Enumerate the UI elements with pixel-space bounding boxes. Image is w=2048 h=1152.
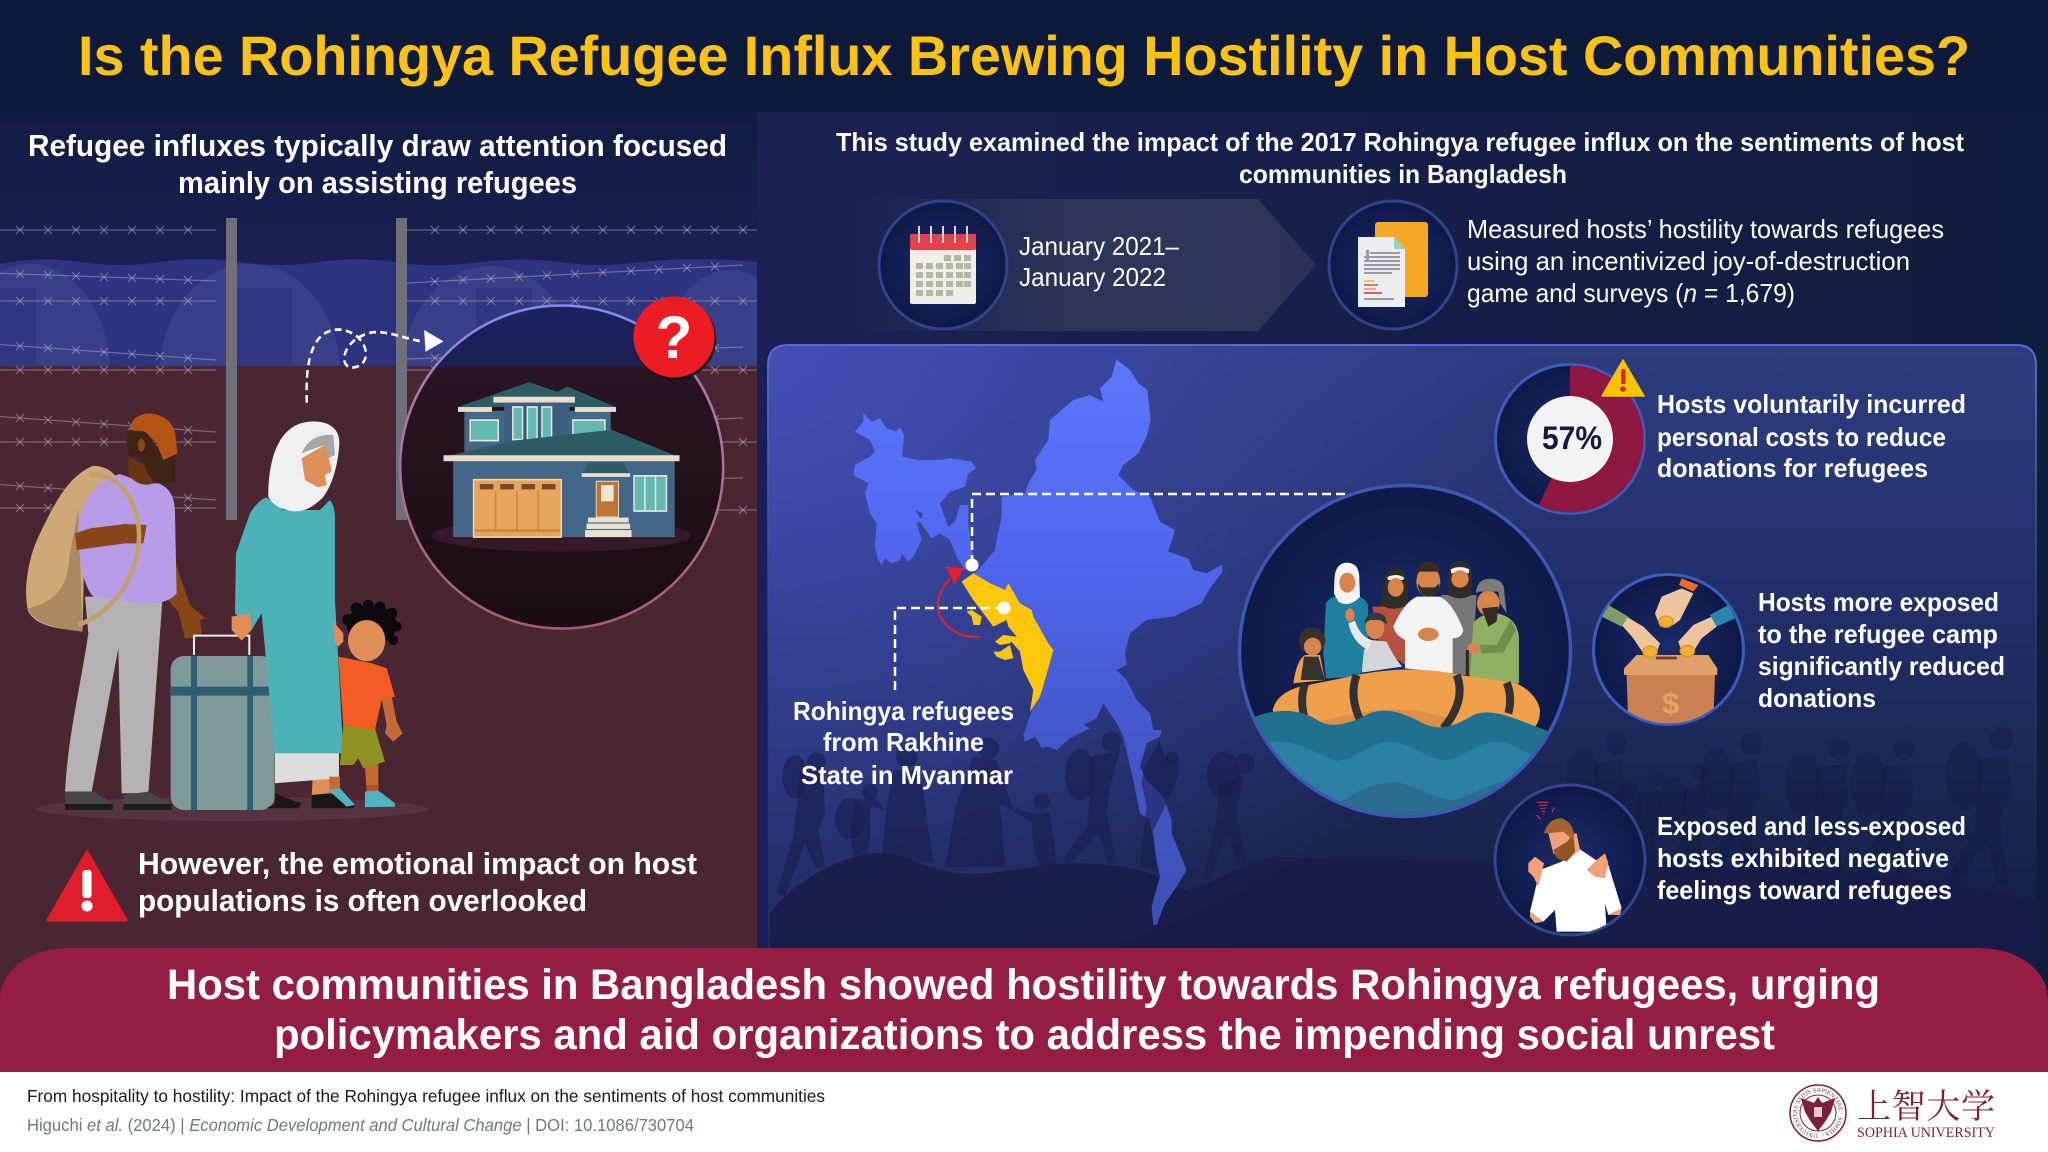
logo: Sophia University xyxy=(1789,1079,1995,1142)
figure: sea waves xyxy=(1253,711,1550,823)
study dates: January 2021– xyxy=(1019,231,1179,261)
map: Bangladesh xyxy=(853,413,978,570)
icon: question mark badge: ? xyxy=(656,304,692,371)
fence posts xyxy=(226,218,407,520)
citation footer: From hospitality to hostility: Impact of the Rohingya refugee influx on the sentiments of host communities xyxy=(27,1086,825,1106)
logo: Sophia University: 上智大学 xyxy=(1857,1079,1995,1128)
logo: Sophia University: SOPHIA UNIVERSITY xyxy=(1857,1125,1995,1141)
panel: left, refugee influx scene xyxy=(0,112,800,1006)
map: Bangladesh and Myanmar xyxy=(853,359,1223,925)
callout: overlooked emotional impact: However, the emotional impact on host xyxy=(138,846,697,881)
donut segment: 57 percent xyxy=(1512,381,1628,497)
map label: from Rakhine xyxy=(823,727,984,757)
donation box: $ xyxy=(1662,686,1679,720)
dashed connector to Rakhine label xyxy=(895,608,1004,693)
icon: calendar xyxy=(879,201,1007,329)
finding 1 text: Hosts voluntarily incurred xyxy=(1657,389,1966,419)
finding 3 text xyxy=(1657,811,1966,905)
finding 3 text: hosts exhibited negative xyxy=(1657,843,1949,873)
donation box xyxy=(1624,655,1717,727)
map label: State in Myanmar xyxy=(801,760,1013,790)
finding 2 text: donations xyxy=(1758,683,1876,713)
icon: question mark badge xyxy=(634,296,716,380)
map: Rakhine State xyxy=(962,573,1053,712)
stress swirl xyxy=(1537,802,1554,819)
stressed man xyxy=(1528,818,1622,932)
arrow: red displacement arc xyxy=(938,567,980,637)
map location dots xyxy=(966,558,1010,614)
heading: study description: communities in Bangladesh xyxy=(1239,159,1567,189)
map label: Rohingya refugees xyxy=(793,696,1014,726)
illustration: refugees on boat xyxy=(1240,486,1570,823)
finding 3 text: Exposed and less-exposed xyxy=(1657,811,1966,841)
figure: inflatable boat xyxy=(1273,670,1540,733)
heading: left panel: mainly on assisting refugees xyxy=(178,165,577,200)
map label xyxy=(793,696,1014,790)
dashed journey arrow xyxy=(307,330,444,403)
callout: overlooked emotional impact: populations is often overlooked xyxy=(138,883,587,918)
callout: overlooked emotional impact xyxy=(138,846,697,918)
finding 1 text: donations for refugees xyxy=(1657,453,1928,483)
figure: man with sack xyxy=(26,413,205,810)
icon: house xyxy=(431,382,691,552)
heading: left panel: Refugee influxes typically draw attention focused xyxy=(28,128,727,163)
conclusion banner: policymakers and aid organizations to address the impending social unrest xyxy=(274,1011,1775,1059)
conclusion banner: Host communities in Bangladesh showed hostility towards Rohingya refugees, urging xyxy=(167,961,1880,1009)
finding 1: donut chart xyxy=(1496,360,1644,514)
refugee family xyxy=(26,413,403,810)
map: Myanmar xyxy=(962,359,1223,925)
hands with coins xyxy=(1602,578,1735,657)
study method text: Measured hosts’ hostility towards refugees xyxy=(1467,214,1944,244)
study dates xyxy=(1019,231,1179,292)
timeline arrow band xyxy=(852,199,1316,331)
finding 2 text: Hosts more exposed xyxy=(1758,587,1999,617)
panel: findings xyxy=(768,345,2036,1000)
figure: suitcase xyxy=(171,636,275,810)
finding 1 text: personal costs to reduce xyxy=(1657,422,1946,452)
icon: warning sign xyxy=(1602,360,1644,396)
figure: elderly woman xyxy=(232,421,355,808)
conclusion banner xyxy=(0,948,2048,1072)
ground shadow xyxy=(36,797,428,821)
study method text: game and surveys (n = 1,679) xyxy=(1467,278,1795,308)
house thought bubble xyxy=(400,306,723,628)
silhouettes on the right xyxy=(1565,727,2013,888)
study method text: using an incentivized joy-of-destruction xyxy=(1467,246,1910,276)
refugee tents backdrop xyxy=(0,259,800,480)
university seal: UNIVERSITAS SEDIS SAPIENTIAE · SOPHIA · xyxy=(1793,1088,1843,1138)
heading: study description: This study examined the impact of the 2017 Rohingya refugee influx on the sentiments of host xyxy=(836,127,1964,157)
icon: documents xyxy=(1329,201,1457,329)
finding 2 text: to the refugee camp xyxy=(1758,619,1998,649)
citation footer xyxy=(27,1086,825,1135)
study dates: January 2022 xyxy=(1019,262,1166,292)
finding 1: donut chart: 57% xyxy=(1542,420,1602,456)
citation footer: Higuchi et al. (2024) | Economic Development and Cultural Change | DOI: 10.1086/730704 xyxy=(27,1115,694,1135)
heading: study description xyxy=(836,127,1964,189)
finding 3: stressed host icon xyxy=(1495,785,1645,935)
title banner xyxy=(0,0,2048,112)
icon: warning triangle xyxy=(48,852,126,920)
study method text xyxy=(1467,214,1944,308)
finding 2: donation box icon xyxy=(1594,574,1744,727)
finding 3 text: feelings toward refugees xyxy=(1657,875,1952,905)
dashed connector to boat xyxy=(972,494,1345,565)
finding 1 text xyxy=(1657,389,1966,483)
heading: left panel xyxy=(28,128,727,200)
finding 2 text: significantly reduced xyxy=(1758,651,2005,681)
background hill xyxy=(770,853,2036,950)
silhouettes of displaced people xyxy=(777,732,1255,897)
figure: child xyxy=(328,600,403,807)
panel: right, study summary xyxy=(757,112,2048,1006)
figure: group of refugees xyxy=(1293,561,1519,683)
barbed wire xyxy=(0,230,771,510)
finding 2 text xyxy=(1758,587,2005,713)
title: Is the Rohingya Refugee Influx Brewing Hostility in Host Communities? xyxy=(78,24,1970,87)
